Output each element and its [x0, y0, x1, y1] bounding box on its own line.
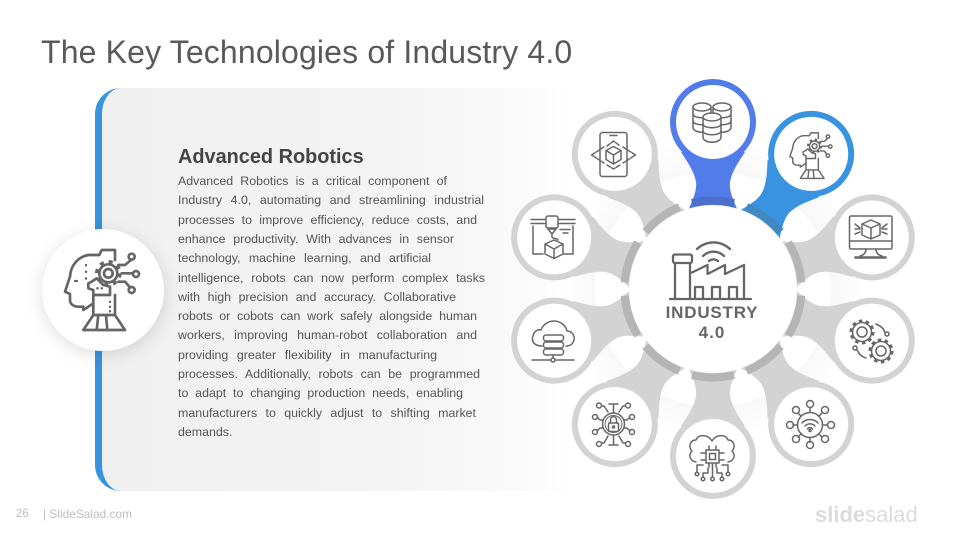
- connector: printer node: [500, 183, 652, 306]
- icon: database: [693, 103, 731, 142]
- text block: description: [178, 174, 485, 439]
- text block: description: robots or cobots can work safely alongside human: [178, 309, 477, 323]
- title: The Key Technologies of Industry 4.0: [41, 34, 572, 70]
- icon: circuit lock: [592, 403, 634, 446]
- hub circle: [629, 205, 797, 373]
- text block: description: processes. Additionally, robots can be programmed: [178, 367, 480, 381]
- badge: white circle behind selected icon: [42, 229, 164, 351]
- icon: wifi network: [786, 400, 834, 448]
- text block: description: workers, improving human-robot collaboration and: [178, 328, 477, 342]
- icon: AR phone: [592, 132, 636, 176]
- text block: description: providing greater flexibility in manufacturing: [178, 348, 437, 362]
- text block: description: enhance productivity. With advances in sensor: [178, 232, 454, 246]
- connector: wifi node: [724, 327, 871, 484]
- connector: database node (blue): [670, 79, 756, 211]
- text block: description: with high precision and accuracy. Collaborative: [178, 290, 456, 304]
- text block: description: Industry 4.0, automating and streamlining industrial: [178, 193, 484, 207]
- icon: factory: [670, 242, 751, 299]
- text block: description: processes to improve efficiency, reduce costs, and: [178, 213, 477, 227]
- connector: brain node: [670, 367, 756, 499]
- text block: description: technology, machine learning, and artificial: [178, 251, 431, 265]
- page number: 26: [16, 508, 29, 520]
- logo wordmark: slidesalad: [815, 502, 918, 527]
- text block: description: manufacturers to quickly adjust to shifting market: [178, 406, 476, 420]
- connector: monitor node: [774, 183, 926, 306]
- icon: robotics head (small): [790, 133, 832, 178]
- icon: gears: [851, 321, 892, 362]
- text block: description: Advanced Robotics is a critical component of: [178, 174, 447, 188]
- label: version number: 4.0: [699, 323, 725, 342]
- heading: Advanced Robotics: Advanced Robotics: [178, 146, 364, 168]
- icon: cloud server: [532, 321, 574, 362]
- icon: selected robotics head (large): [65, 250, 139, 330]
- footer site name: | SlideSalad.com: [43, 507, 132, 521]
- connector: lock node: [555, 327, 702, 484]
- text block: description: to adapt to changing production needs, enabling: [178, 386, 463, 400]
- connector: cloud node: [500, 272, 652, 395]
- connector: gears node: [774, 272, 926, 395]
- text block: description: demands.: [178, 425, 232, 439]
- connector: AR node: [555, 94, 702, 251]
- connector: robotics node (light blue): [724, 94, 871, 251]
- text block: description: intelligence, robots can now perform complex tasks: [178, 270, 485, 284]
- decorative glow around hub: [563, 139, 863, 439]
- icon: monitor with cube: [850, 216, 892, 258]
- icon: 3D printer: [531, 216, 575, 258]
- icon: AI brain chip: [690, 436, 734, 481]
- label: INDUSTRY 4.0: INDUSTRY: [666, 303, 758, 322]
- panel: description background: [95, 88, 575, 491]
